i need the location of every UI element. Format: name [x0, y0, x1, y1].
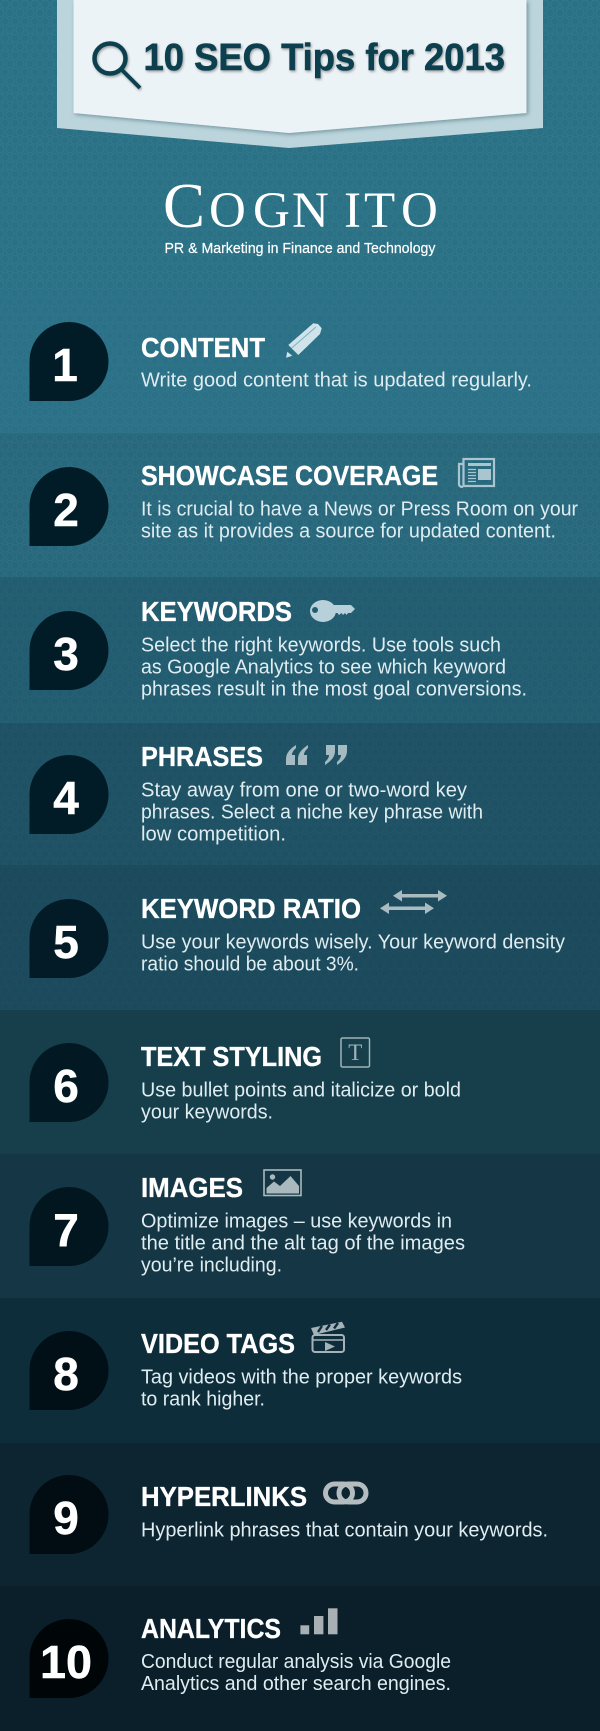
- icon: newspaper: [459, 459, 494, 487]
- icon: chain links: [326, 1484, 366, 1502]
- description: Use bullet points and italicize or bold: [141, 1080, 461, 1102]
- description: [141, 1211, 465, 1277]
- icon: quotation marks: [286, 745, 347, 765]
- description: Conduct regular analysis via Google: [141, 1651, 451, 1673]
- number badge 9: [30, 1475, 108, 1554]
- title: 10 SEO Tips for 2013: [144, 37, 505, 79]
- heading: SHOWCASE COVERAGE: [141, 460, 438, 491]
- description: [141, 499, 578, 542]
- description: phrases result in the most goal conversions.: [141, 678, 527, 700]
- number badge 6: 6: [53, 1060, 79, 1112]
- tip 8: video tags: [0, 1298, 600, 1443]
- number badge 10: 10: [40, 1636, 92, 1688]
- icon: bar chart: [300, 1608, 338, 1634]
- number badge 1: [30, 322, 108, 401]
- number badge 7: 7: [53, 1204, 79, 1256]
- number badge 4: 4: [53, 772, 79, 824]
- description: [141, 780, 483, 846]
- number badge 3: [30, 611, 108, 690]
- description: Hyperlink phrases that contain your keywords.: [141, 1520, 548, 1542]
- header background: [0, 0, 600, 289]
- description: as Google Analytics to see which keyword: [141, 656, 506, 678]
- description: [141, 635, 527, 700]
- icon: text box: [341, 1038, 370, 1067]
- description: low competition.: [141, 824, 286, 846]
- icon: text box: T: [348, 1040, 362, 1065]
- heading: ANALYTICS: [141, 1613, 281, 1644]
- logo wordmark: COGNITO: [163, 171, 438, 241]
- description: the title and the alt tag of the images: [141, 1233, 465, 1255]
- icon: key: [310, 600, 355, 622]
- banner inner panel: [74, 0, 526, 133]
- tip 10: analytics: [0, 1586, 600, 1731]
- number badge 5: 5: [53, 916, 79, 968]
- tip 1: content: [0, 289, 600, 433]
- title banner: [57, 0, 543, 148]
- number badge 3: 3: [53, 628, 79, 680]
- icon: magnifying glass: [94, 44, 140, 88]
- icon: clapperboard: [311, 1322, 345, 1352]
- description: your keywords.: [141, 1102, 273, 1124]
- icon: picture: [264, 1170, 301, 1196]
- icon: arrows: [380, 890, 447, 914]
- number badge 2: [30, 467, 108, 546]
- number badge 8: [30, 1331, 108, 1410]
- description: you’re including.: [141, 1255, 282, 1277]
- description: [141, 1366, 462, 1410]
- description: Analytics and other search engines.: [141, 1673, 451, 1695]
- number badge 1: 1: [52, 339, 78, 391]
- description: It is crucial to have a News or Press Room on your: [141, 499, 578, 521]
- tip 5: keyword ratio: [0, 865, 600, 1010]
- heading: CONTENT: [141, 332, 265, 363]
- tip 3: keywords: [0, 577, 600, 723]
- heading: TEXT STYLING: [141, 1041, 322, 1072]
- tip 6: text styling: [0, 1010, 600, 1154]
- banner outer ribbon: [57, 0, 543, 148]
- description: Optimize images – use keywords in: [141, 1211, 452, 1233]
- number badge 9: 9: [53, 1492, 79, 1544]
- heading: IMAGES: [141, 1172, 243, 1203]
- description: site as it provides a source for updated content.: [141, 520, 556, 542]
- heading: PHRASES: [141, 741, 263, 772]
- heading: VIDEO TAGS: [141, 1328, 295, 1359]
- description: [141, 932, 565, 976]
- description: Use your keywords wisely. Your keyword density: [141, 932, 565, 954]
- number badge 10: [30, 1619, 108, 1698]
- number badge 6: [30, 1043, 108, 1122]
- tip 4: phrases: [0, 723, 600, 865]
- heading: KEYWORDS: [141, 596, 292, 627]
- number badge 4: [30, 755, 108, 834]
- number badge 8: 8: [53, 1348, 79, 1400]
- description: Select the right keywords. Use tools such: [141, 635, 501, 657]
- tip 9: hyperlinks: [0, 1443, 600, 1586]
- heading: KEYWORD RATIO: [141, 893, 361, 924]
- logo tagline: PR & Marketing in Finance and Technology: [164, 240, 436, 257]
- tip 7: images: [0, 1154, 600, 1298]
- description: Stay away from one or two-word key: [141, 780, 467, 802]
- heading: HYPERLINKS: [141, 1481, 307, 1512]
- number badge 5: [30, 899, 108, 978]
- Cognito logo: [163, 171, 438, 257]
- tip 2: showcase coverage: [0, 433, 600, 577]
- description: [141, 1080, 461, 1124]
- description: Tag videos with the proper keywords: [141, 1366, 462, 1388]
- number badge 2: 2: [53, 484, 79, 536]
- description: [141, 1651, 451, 1695]
- icon: pencil: [286, 323, 322, 358]
- description: Write good content that is updated regularly.: [141, 370, 532, 392]
- description: ratio should be about 3%.: [141, 954, 359, 976]
- description: phrases. Select a niche key phrase with: [141, 802, 483, 824]
- number badge 7: [30, 1187, 108, 1266]
- description: to rank higher.: [141, 1388, 265, 1410]
